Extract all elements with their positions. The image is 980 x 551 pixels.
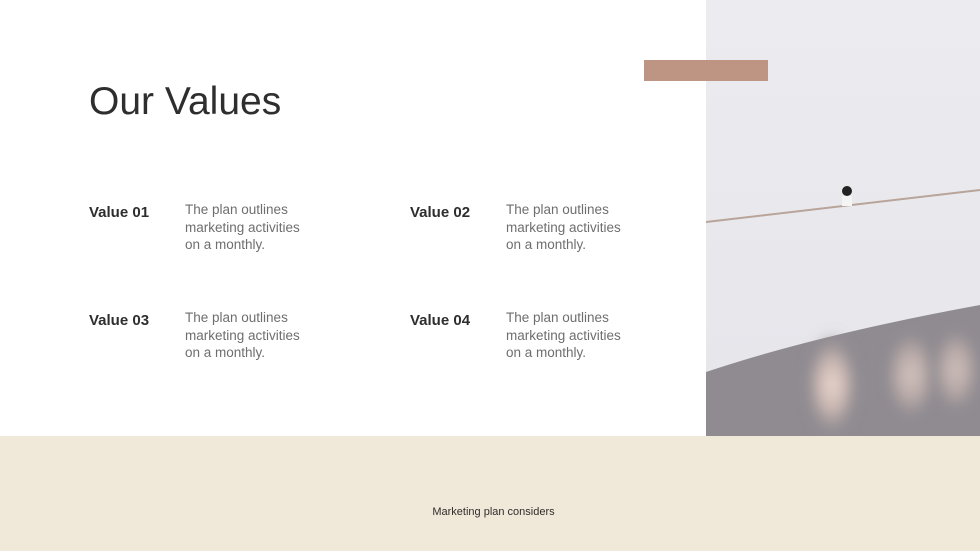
- photo: [706, 0, 980, 436]
- value 02 heading: Value 02: [410, 204, 470, 221]
- value 02 text: The plan outlines marketing activities on a monthly.: [506, 202, 621, 252]
- footer text: Marketing plan considers: [432, 506, 555, 518]
- value 01 heading: Value 01: [89, 204, 149, 221]
- accent bar: [644, 60, 768, 81]
- value 04 block: [410, 310, 621, 360]
- value 04 heading: Value 04: [410, 312, 470, 329]
- footer band: [0, 436, 980, 551]
- value 04 text: The plan outlines marketing activities on a monthly.: [506, 310, 621, 360]
- value 02 block: [410, 202, 621, 252]
- value 03 block: [89, 310, 300, 360]
- value 01 text: The plan outlines marketing activities on a monthly.: [185, 202, 300, 252]
- title: Our Values: [89, 80, 281, 123]
- value 03 text: The plan outlines marketing activities on a monthly.: [185, 310, 300, 360]
- value 03 heading: Value 03: [89, 312, 149, 329]
- value 01 block: [89, 202, 300, 252]
